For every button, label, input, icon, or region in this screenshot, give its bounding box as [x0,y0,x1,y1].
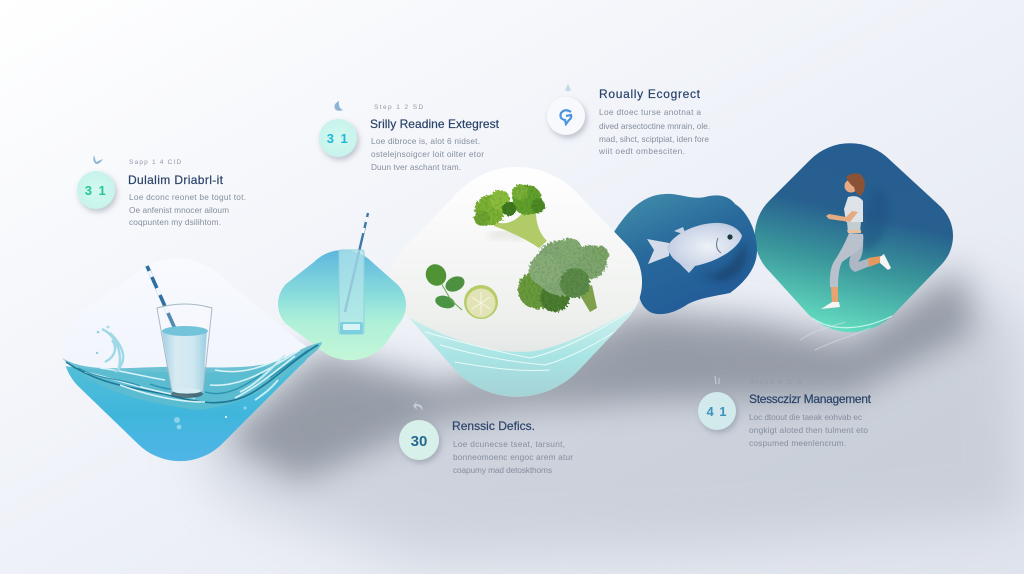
icon: small droplet [565,84,571,92]
number badge [319,119,357,157]
heading: Stessczizr Management [749,392,872,406]
step label: Stepn 4 O S [750,379,802,386]
icon: broccoli small [474,184,547,248]
body copy [129,192,246,227]
icon: small arrow glyph [413,401,422,411]
water body [66,352,309,462]
leg back [849,240,870,272]
body copy: coapumy mad detoskthoms [453,465,552,475]
arm [826,211,858,222]
heading: Roually Ecogrect [599,87,701,101]
panel: movement diamond [755,143,953,350]
number badge: 3 1 [85,183,107,198]
number badge: 4 1 [706,404,728,419]
leg front [830,233,863,287]
number badge: 3 1 [327,131,349,146]
icon: small tick [715,376,719,384]
diamond upper pale body [63,258,309,461]
body copy: ongkigt aloted then tulment eto [749,425,868,435]
panel: second glass diamond [278,213,406,360]
icon: small crescent [334,101,343,111]
body copy: Loe dtoec turse anotnat a [599,107,701,117]
step 3 text block [547,84,710,156]
water wave and splash [62,326,322,429]
body copy [749,412,868,448]
body copy: Loe dcunecse tseat, tarsunt, [453,439,565,449]
icon: herb leaves [422,260,467,310]
body copy: Loe dibroce is, alot 6 nidset. [371,136,480,146]
body copy: mad, sihct, sciptpiat, iden fore [599,134,709,144]
number badge [77,171,115,209]
drop shadow under the diamond chain [190,270,1024,560]
body copy: coqpunten my dsilihtom. [129,217,221,227]
body copy [598,107,710,156]
panel: fish blob [614,194,757,314]
body copy: Loe dconc reonet be togut tot. [129,192,246,202]
body copy: Oe anfenist mnocer ailoum [129,205,229,215]
number badge: 30 [411,433,427,450]
icon: runner figure [821,173,891,309]
heading: Renssic Defics. [452,419,535,433]
body copy: cospumed meenlencrum. [749,438,846,448]
panel: hydration diamond [62,265,322,462]
panel: nutrition diamond [404,167,642,397]
body copy: Duun tver aschant tram. [371,162,461,172]
icon: broccoli large [518,238,609,312]
torso [844,196,863,222]
body copy: ostelejnsoigcer loit oilter etor [371,149,484,159]
step 2 text block [319,101,500,172]
body copy [453,439,573,475]
head and hair [844,180,858,192]
body copy: dived arsectoctine mnrain, ole. [599,121,710,131]
body copy: Loc dtoout die taeak eohvab ec [749,412,862,422]
step label: Step 1 2 SD [374,104,424,111]
number badge [399,420,439,460]
step 5 text block [698,376,872,448]
icon: fish [647,223,742,273]
heading: Srilly Readine Extegrest [370,117,500,131]
icon: tall glass with straw [339,213,368,334]
step 1 text block [77,155,246,227]
icon badge [547,97,585,135]
body copy: wiit oedt ombesciten. [598,146,685,156]
step 4 text block [399,401,573,475]
step label: Sapp 1 4 CID [129,159,182,166]
number badge [698,392,736,430]
icon: lemon slice [464,285,498,319]
body copy: bonneomoenc engoc arem atur [453,452,573,462]
wave band [410,308,636,397]
heading: Dulalim Driabrl-it [128,173,224,187]
icon: small drop [93,155,103,164]
icon: drinking glass with straw [147,266,212,398]
body copy [371,136,484,172]
